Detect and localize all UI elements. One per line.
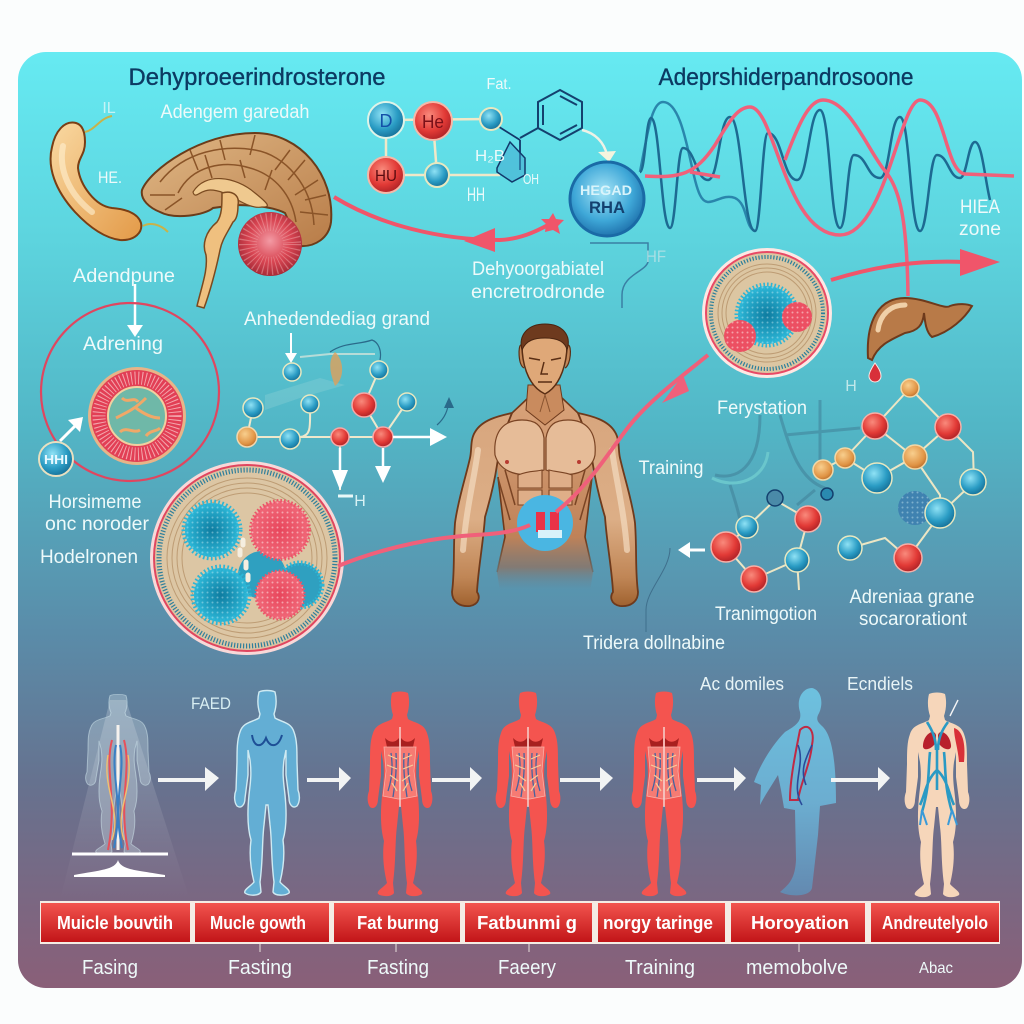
grey pipe connectors [712,400,860,520]
red connector lines [338,355,708,566]
label: adrenal gland middle: Anhedendediag grand [244,309,430,330]
text block: center top label: encretrodronde [471,282,605,303]
bottom labels: Fasting [228,957,292,979]
icon: brain [142,133,331,308]
molecule diagram top: He [422,112,444,132]
bottom labels: Faeery [498,957,556,979]
circle callout: adrenal cross section: Adrening [83,334,163,355]
molecule diagram top [368,90,616,206]
bottom labels: memobolve [746,957,848,979]
figure 3: red body [368,692,432,896]
figure 4: red body [496,692,560,896]
label: adrenal gland: Adengem garedah [160,102,310,123]
text block: center top label [471,259,605,303]
line chart: hormone waves [640,100,1014,296]
bracket with HF label [590,243,666,308]
bottom labels [82,944,953,979]
bracket with HF label: HF [646,247,666,266]
figure 7: anatomical skin body [905,692,969,897]
arrow 3 [432,767,482,791]
molecule diagram middle: H [354,493,366,510]
cell: upper right [702,248,832,378]
label: HEA zone: HIEA [960,197,1000,218]
arrow: red curve from brain to sphere [334,197,564,252]
banner row: Fat burıng [357,913,439,933]
arrow 4 [560,767,613,791]
arrow: red to right [831,249,1000,280]
text block: adrenal grane: socarorationt [859,609,968,630]
figure 1: translucent body on platform [60,694,190,900]
label: H: H [845,378,857,395]
icon: pituitary gland [238,212,302,276]
molecule diagram right [813,379,986,572]
banner row [40,901,1000,944]
banner row: Horoyation [751,913,849,933]
label: Ac domiles: Ac domiles [700,674,784,694]
thin lead line [646,548,670,632]
molecule diagram top: D [380,111,392,131]
label: HEA zone: zone [959,219,1001,240]
hormone badge on abdomen [517,495,573,551]
banner row: Muicle bouvtih [57,913,173,933]
molecule diagram top: HH [467,185,485,206]
text block: left hormone labels [40,492,150,568]
bottom labels: Fasing [82,957,138,979]
label: Feystation: Ferystation [717,398,807,419]
text block: adrenal grane: Adreniaa grane [850,587,974,608]
circle callout: adrenal cross section: HHI [44,452,68,467]
bottom labels: Training [625,957,695,979]
figure 6: side view blue body [754,688,836,895]
icon: liver [868,298,972,382]
icon: adrenal organ [51,116,168,240]
label: HE: HE. [98,168,122,187]
label: IL: IL [102,100,116,117]
banner row: Fatbunmi g [477,913,577,933]
molecule diagram middle [237,333,454,510]
label: FAED: FAED [191,694,231,713]
banner row: norgy taringe [603,913,713,933]
label: Adrenopune with arrow [73,266,175,337]
text block: adrenal grane [850,587,974,630]
figure 5: red body [632,692,696,896]
hormone sphere [570,162,644,236]
hormone sphere: HEGAD [580,182,632,198]
hormone sphere: RHA [589,198,625,217]
text block: center top label: Dehyoorgabiatel [472,259,604,280]
molecule diagram lower right [678,488,833,592]
figure 2: blue body [235,690,299,895]
bottom labels: Abac [919,960,953,977]
molecule diagram top: OH [523,171,539,188]
arrow 2 [307,767,351,791]
bottom labels: Fasting [367,957,429,979]
figure: muscular man [452,324,638,606]
cell: lower left large [150,461,344,655]
molecule diagram top: HU [375,168,397,185]
label: HEA zone [959,197,1001,240]
arrow 1 [158,767,219,791]
banner row: Andreutelyolo [882,913,988,933]
text block: left hormone labels: Horsimeme [48,492,142,513]
text block: left hormone labels: Hodelronen [40,547,138,568]
label: Adrenopune with arrow: Adendpune [73,266,175,287]
arrow 6 [831,767,890,791]
arrow 5 [697,767,746,791]
title: left: Dehyproeerindrosterone [128,64,386,91]
label: fat: Fat. [486,76,512,93]
label: Tranimgotion: Tranimgotion [715,604,817,625]
molecule diagram top: H₂B [475,148,505,165]
label: Training: Training [638,458,704,479]
banner row: Mucle gowth [210,913,306,933]
label: tridera: Tridera dollnabine [583,633,725,654]
text block: left hormone labels: onc noroder [45,514,150,535]
circle callout: adrenal cross section [39,303,219,481]
title: right: Adeprshiderpandrosoone [658,64,914,91]
label: Ecndiels: Ecndiels [847,674,913,694]
